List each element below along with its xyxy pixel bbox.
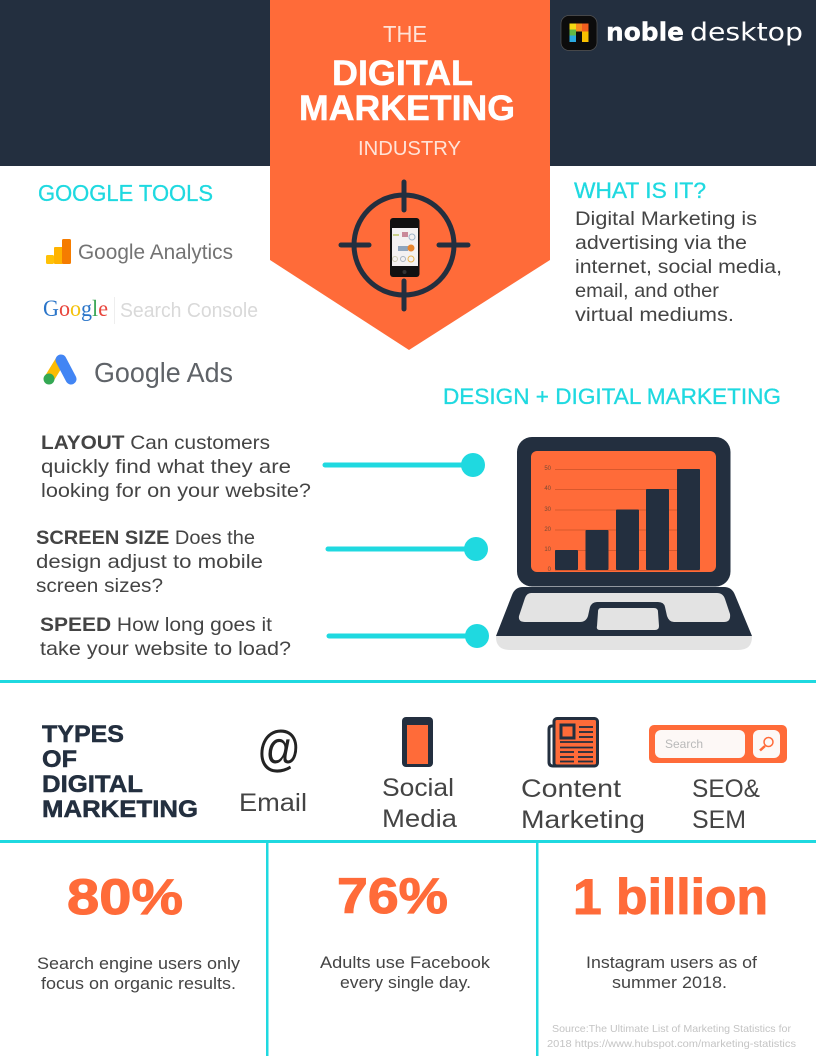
title banner <box>270 0 550 350</box>
text: layout: looking for on your website? <box>41 480 311 502</box>
type: content marketing: Content <box>521 775 621 803</box>
text: speed: take your website to load? <box>40 638 291 660</box>
source note <box>547 1023 796 1050</box>
source note: 2018 https://www.hubspot.com/marketing-statistics <box>547 1038 796 1050</box>
stat: 80 percent: Search engine users only <box>37 954 241 973</box>
text: layout <box>41 432 311 502</box>
stat: 76 percent <box>320 868 491 992</box>
stat: 1 billion: summer 2018. <box>612 973 727 992</box>
heading: types of digital marketing: TYPES <box>42 721 124 748</box>
icon: at sign: @ <box>257 721 301 777</box>
icon: newspaper <box>549 718 598 766</box>
type: content marketing: Marketing <box>521 806 645 834</box>
chart: 40 <box>544 486 552 492</box>
title: MARKETING <box>299 89 515 128</box>
text: screen size: screen sizes? <box>36 575 163 597</box>
chart: 10 <box>544 547 552 553</box>
stat: 76 percent: Adults use Facebook <box>320 953 491 972</box>
type: email: Email <box>239 789 307 817</box>
text block: what is it: WHAT IS IT? <box>574 178 706 203</box>
icon: search bar: Search <box>665 737 703 751</box>
chart: 50 <box>544 466 552 472</box>
chart: 20 <box>544 527 552 533</box>
icon: laptop with bar chart <box>496 437 752 650</box>
text block: what is it: virtual mediums. <box>575 304 734 326</box>
text block: what is it: internet, social media, <box>575 256 782 278</box>
text: speed <box>40 614 291 660</box>
heading: types of digital marketing: MARKETING <box>42 796 198 823</box>
stat: 1 billion: 1 billion <box>573 869 768 925</box>
heading: types of digital marketing <box>42 721 198 823</box>
type: seo and sem <box>649 725 787 834</box>
icon: smartphone <box>402 717 433 767</box>
type: content marketing <box>521 718 645 834</box>
text: screen size: design adjust to mobile <box>36 551 263 573</box>
logo: google analytics: Google Analytics <box>78 241 233 264</box>
stat: 80 percent: focus on organic results. <box>41 974 236 993</box>
connector: speed <box>329 624 489 648</box>
text: layout: LAYOUT Can customers <box>41 432 270 454</box>
text: screen size <box>36 527 263 597</box>
chart <box>544 466 700 573</box>
chart: 0 <box>548 567 552 573</box>
header band <box>0 0 816 166</box>
heading: types of digital marketing: DIGITAL <box>42 771 143 798</box>
heading: design + digital marketing: DESIGN + DIGITAL MARKETING <box>443 384 781 409</box>
type: seo and sem: SEM <box>692 806 746 834</box>
icon: target with phone <box>341 182 468 309</box>
stat: 1 billion: Instagram users as of <box>586 953 757 972</box>
title <box>299 21 515 160</box>
dividers <box>0 680 816 1056</box>
text block: what is it: advertising via the <box>575 232 747 254</box>
logo: google search console: Search Console <box>120 300 258 322</box>
heading: google tools: GOOGLE TOOLS <box>38 180 213 206</box>
type: social media: Social <box>382 774 454 802</box>
type: email <box>239 721 307 817</box>
logo: noble desktop: noble <box>606 18 684 46</box>
text block: what is it: email, and other <box>575 280 720 302</box>
logo: noble desktop <box>561 16 803 50</box>
stat: 80 percent <box>37 869 241 993</box>
title: DIGITAL <box>332 54 473 93</box>
logo: google search console: Google <box>43 296 108 321</box>
logo: noble desktop: desktop <box>690 18 803 46</box>
stat: 76 percent: every single day. <box>340 973 471 992</box>
text: layout: quickly find what they are <box>41 456 291 478</box>
stat: 76 percent: 76% <box>337 868 448 924</box>
source note: Source:The Ultimate List of Marketing Statistics for <box>552 1023 791 1035</box>
logo: google search console <box>43 296 258 324</box>
logo: google ads: Google Ads <box>94 357 233 388</box>
connector: screen size <box>328 537 488 561</box>
stat: 80 percent: 80% <box>67 869 183 925</box>
chart: 30 <box>544 507 552 513</box>
title: THE <box>383 21 427 47</box>
connector: layout <box>325 453 485 477</box>
text: speed: SPEED How long goes it <box>40 614 273 636</box>
type: seo and sem: SEO& <box>692 775 760 803</box>
text block: what is it <box>574 178 782 326</box>
type: social media <box>382 717 457 833</box>
stat: 1 billion <box>573 869 768 992</box>
heading: types of digital marketing: OF <box>42 746 77 773</box>
type: social media: Media <box>382 805 457 833</box>
text block: what is it: Digital Marketing is <box>575 208 757 230</box>
text: screen size: SCREEN SIZE Does the <box>36 527 255 549</box>
title: INDUSTRY <box>358 138 461 160</box>
